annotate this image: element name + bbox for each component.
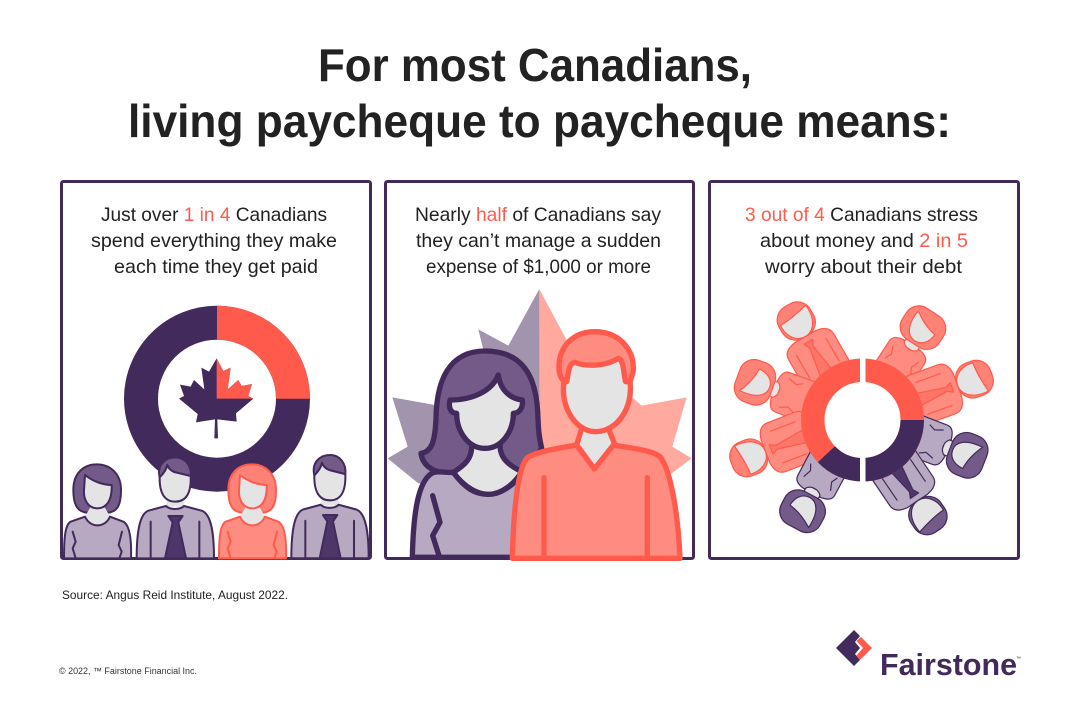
illustration: couple and maple leaf	[388, 289, 692, 558]
trademark: ™	[1016, 656, 1021, 662]
panel: sudden expense	[386, 182, 694, 558]
icon: logo diamond	[836, 630, 872, 666]
person: woman highlighted	[219, 464, 286, 558]
person 5	[723, 409, 821, 489]
panel 3 text	[745, 204, 978, 278]
title	[128, 39, 951, 147]
panel 2 text: they can’t manage a sudden	[416, 230, 661, 252]
person 6	[898, 411, 992, 482]
person: man right	[291, 455, 369, 558]
panel 1 text	[91, 204, 337, 278]
panel: money stress	[710, 182, 1018, 558]
person 3	[902, 349, 1000, 427]
panel 2 text: Nearly half of Canadians say	[415, 204, 661, 226]
person 7	[868, 445, 960, 545]
person 8	[774, 443, 853, 538]
panel 3 text: 3 out of 4 Canadians stress	[745, 204, 978, 226]
people row	[64, 455, 369, 558]
donut chart: 1 in 4	[141, 306, 310, 475]
person 2	[869, 300, 951, 395]
donut chart: stress and debt	[813, 355, 924, 485]
maple leaf background	[388, 289, 692, 485]
circle of people	[723, 292, 1000, 545]
icon: maple leaf	[179, 358, 253, 438]
person 1	[765, 292, 853, 393]
person: man	[137, 457, 214, 558]
panel: spend everything	[62, 182, 370, 558]
panel 2 text	[415, 204, 661, 278]
logo: Fairstone	[836, 630, 1021, 682]
panel 1 text: each time they get paid	[114, 256, 318, 278]
person: woman	[64, 464, 131, 558]
copyright: © 2022, ™ Fairstone Financial Inc.	[59, 666, 197, 676]
panel 2 text: expense of $1,000 or more	[426, 256, 651, 278]
person: man	[512, 332, 680, 558]
person: woman	[412, 351, 542, 557]
source note: Source: Angus Reid Institute, August 2022.	[62, 588, 288, 602]
person 4	[730, 355, 824, 425]
panel 3 text: worry about their debt	[764, 256, 963, 278]
panel 1 text: Just over 1 in 4 Canadians	[101, 204, 327, 226]
panel 3 text: about money and 2 in 5	[760, 230, 968, 252]
panel 1 text: spend everything they make	[91, 230, 337, 252]
title: For most Canadians,	[318, 39, 752, 91]
logo wordmark: Fairstone	[880, 647, 1017, 682]
title: living paycheque to paycheque means:	[128, 95, 951, 147]
